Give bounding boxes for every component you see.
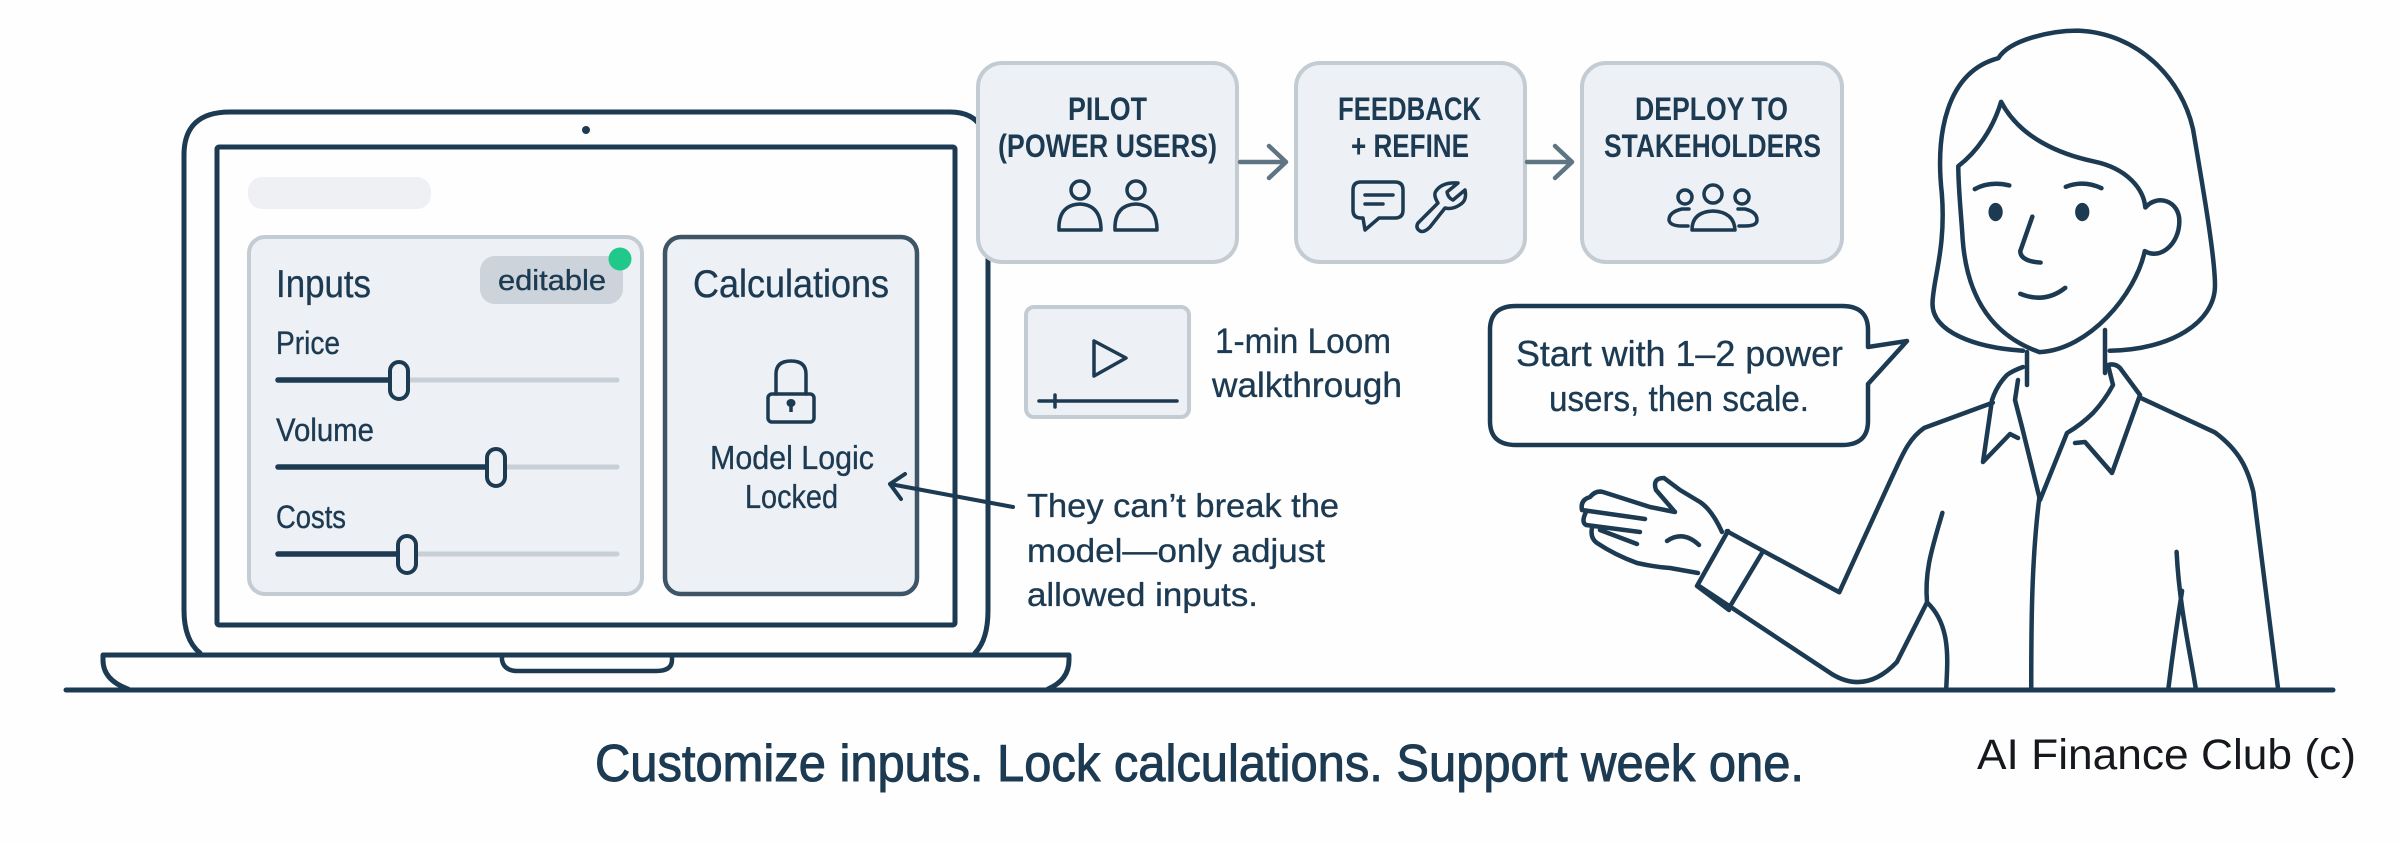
speech bubble: users, then scale. — [1549, 378, 1809, 419]
video label: 1-min Loom — [1215, 322, 1391, 361]
slider: costs: Costs — [276, 499, 346, 535]
callout: model protection — [1027, 487, 1339, 613]
laptop — [103, 112, 1069, 689]
step: pilot: (POWER USERS) — [998, 128, 1217, 164]
video thumbnail — [1026, 307, 1189, 417]
arrow: pilot to feedback — [1240, 146, 1286, 178]
speech bubble — [1490, 306, 1907, 445]
calculations heading: Calculations — [693, 263, 889, 306]
ground line — [66, 688, 2333, 692]
progress bar — [1039, 395, 1177, 407]
collar — [1983, 364, 2140, 500]
step: deploy to stakeholders — [1582, 63, 1842, 262]
hand — [1582, 478, 1722, 573]
callout: model protection: model—only adjust — [1027, 532, 1325, 569]
right arm crease — [2168, 552, 2196, 689]
cuff — [1697, 531, 1762, 610]
speech bubble: Start with 1–2 power — [1516, 333, 1843, 374]
hair — [1933, 31, 2215, 351]
step: feedback and refine: + REFINE — [1351, 128, 1469, 164]
arrow: callout to locked logic — [890, 474, 1013, 507]
slider: volume — [276, 412, 617, 486]
head and upper body — [1699, 31, 2278, 689]
credit: AI Finance Club (c) — [1977, 731, 2356, 779]
laptop base — [103, 655, 1069, 689]
laptop screen frame — [217, 147, 955, 625]
mouth — [2020, 288, 2065, 298]
icon: play — [1094, 341, 1126, 376]
slider: price — [276, 325, 617, 399]
editable badge: editable — [498, 265, 606, 297]
right shoulder — [2141, 398, 2278, 689]
panel: inputs — [249, 237, 642, 594]
video label — [1211, 322, 1402, 405]
slider: costs — [276, 499, 617, 573]
icon: group of users — [1669, 185, 1757, 230]
step: deploy to stakeholders: DEPLOY TO — [1635, 91, 1788, 127]
icon: chat bubble — [1353, 182, 1403, 230]
eyebrows — [1975, 184, 2101, 189]
icon: wrench — [1417, 183, 1466, 232]
icon: lock — [768, 361, 814, 422]
step: feedback and refine — [1296, 63, 1525, 262]
torso crease — [1926, 513, 1942, 602]
tagline: Customize inputs. Lock calculations. Support week one. — [595, 735, 1804, 793]
laptop notch — [502, 657, 672, 671]
inputs heading: Inputs — [276, 263, 371, 306]
icon: two users — [1059, 181, 1157, 230]
laptop lid — [184, 112, 988, 653]
model logic locked label: Locked — [745, 478, 838, 515]
callout: model protection: allowed inputs. — [1027, 576, 1258, 613]
model logic locked label: Model Logic — [710, 439, 874, 476]
step: deploy to stakeholders: STAKEHOLDERS — [1604, 128, 1821, 164]
slider: price: Price — [276, 325, 340, 361]
arrow: feedback to deploy — [1527, 146, 1572, 178]
face — [1958, 102, 2179, 352]
editable badge — [480, 248, 632, 304]
shirt placket — [2031, 497, 2039, 689]
eyes — [1988, 203, 2089, 221]
camera — [582, 126, 590, 134]
nose — [2020, 217, 2041, 263]
video label: walkthrough — [1211, 366, 1402, 405]
presenter illustration — [1582, 31, 2278, 689]
neck — [2027, 330, 2105, 385]
model logic locked label — [710, 439, 874, 515]
left shoulder and arm — [1699, 403, 1993, 689]
step: pilot — [978, 63, 1237, 262]
slider: volume: Volume — [276, 412, 374, 448]
callout: model protection: They can’t break the — [1027, 487, 1339, 524]
top placeholder pill — [248, 177, 431, 209]
step: feedback and refine: FEEDBACK — [1338, 91, 1481, 127]
step: pilot: PILOT — [1068, 91, 1147, 127]
panel: calculations — [665, 237, 917, 594]
